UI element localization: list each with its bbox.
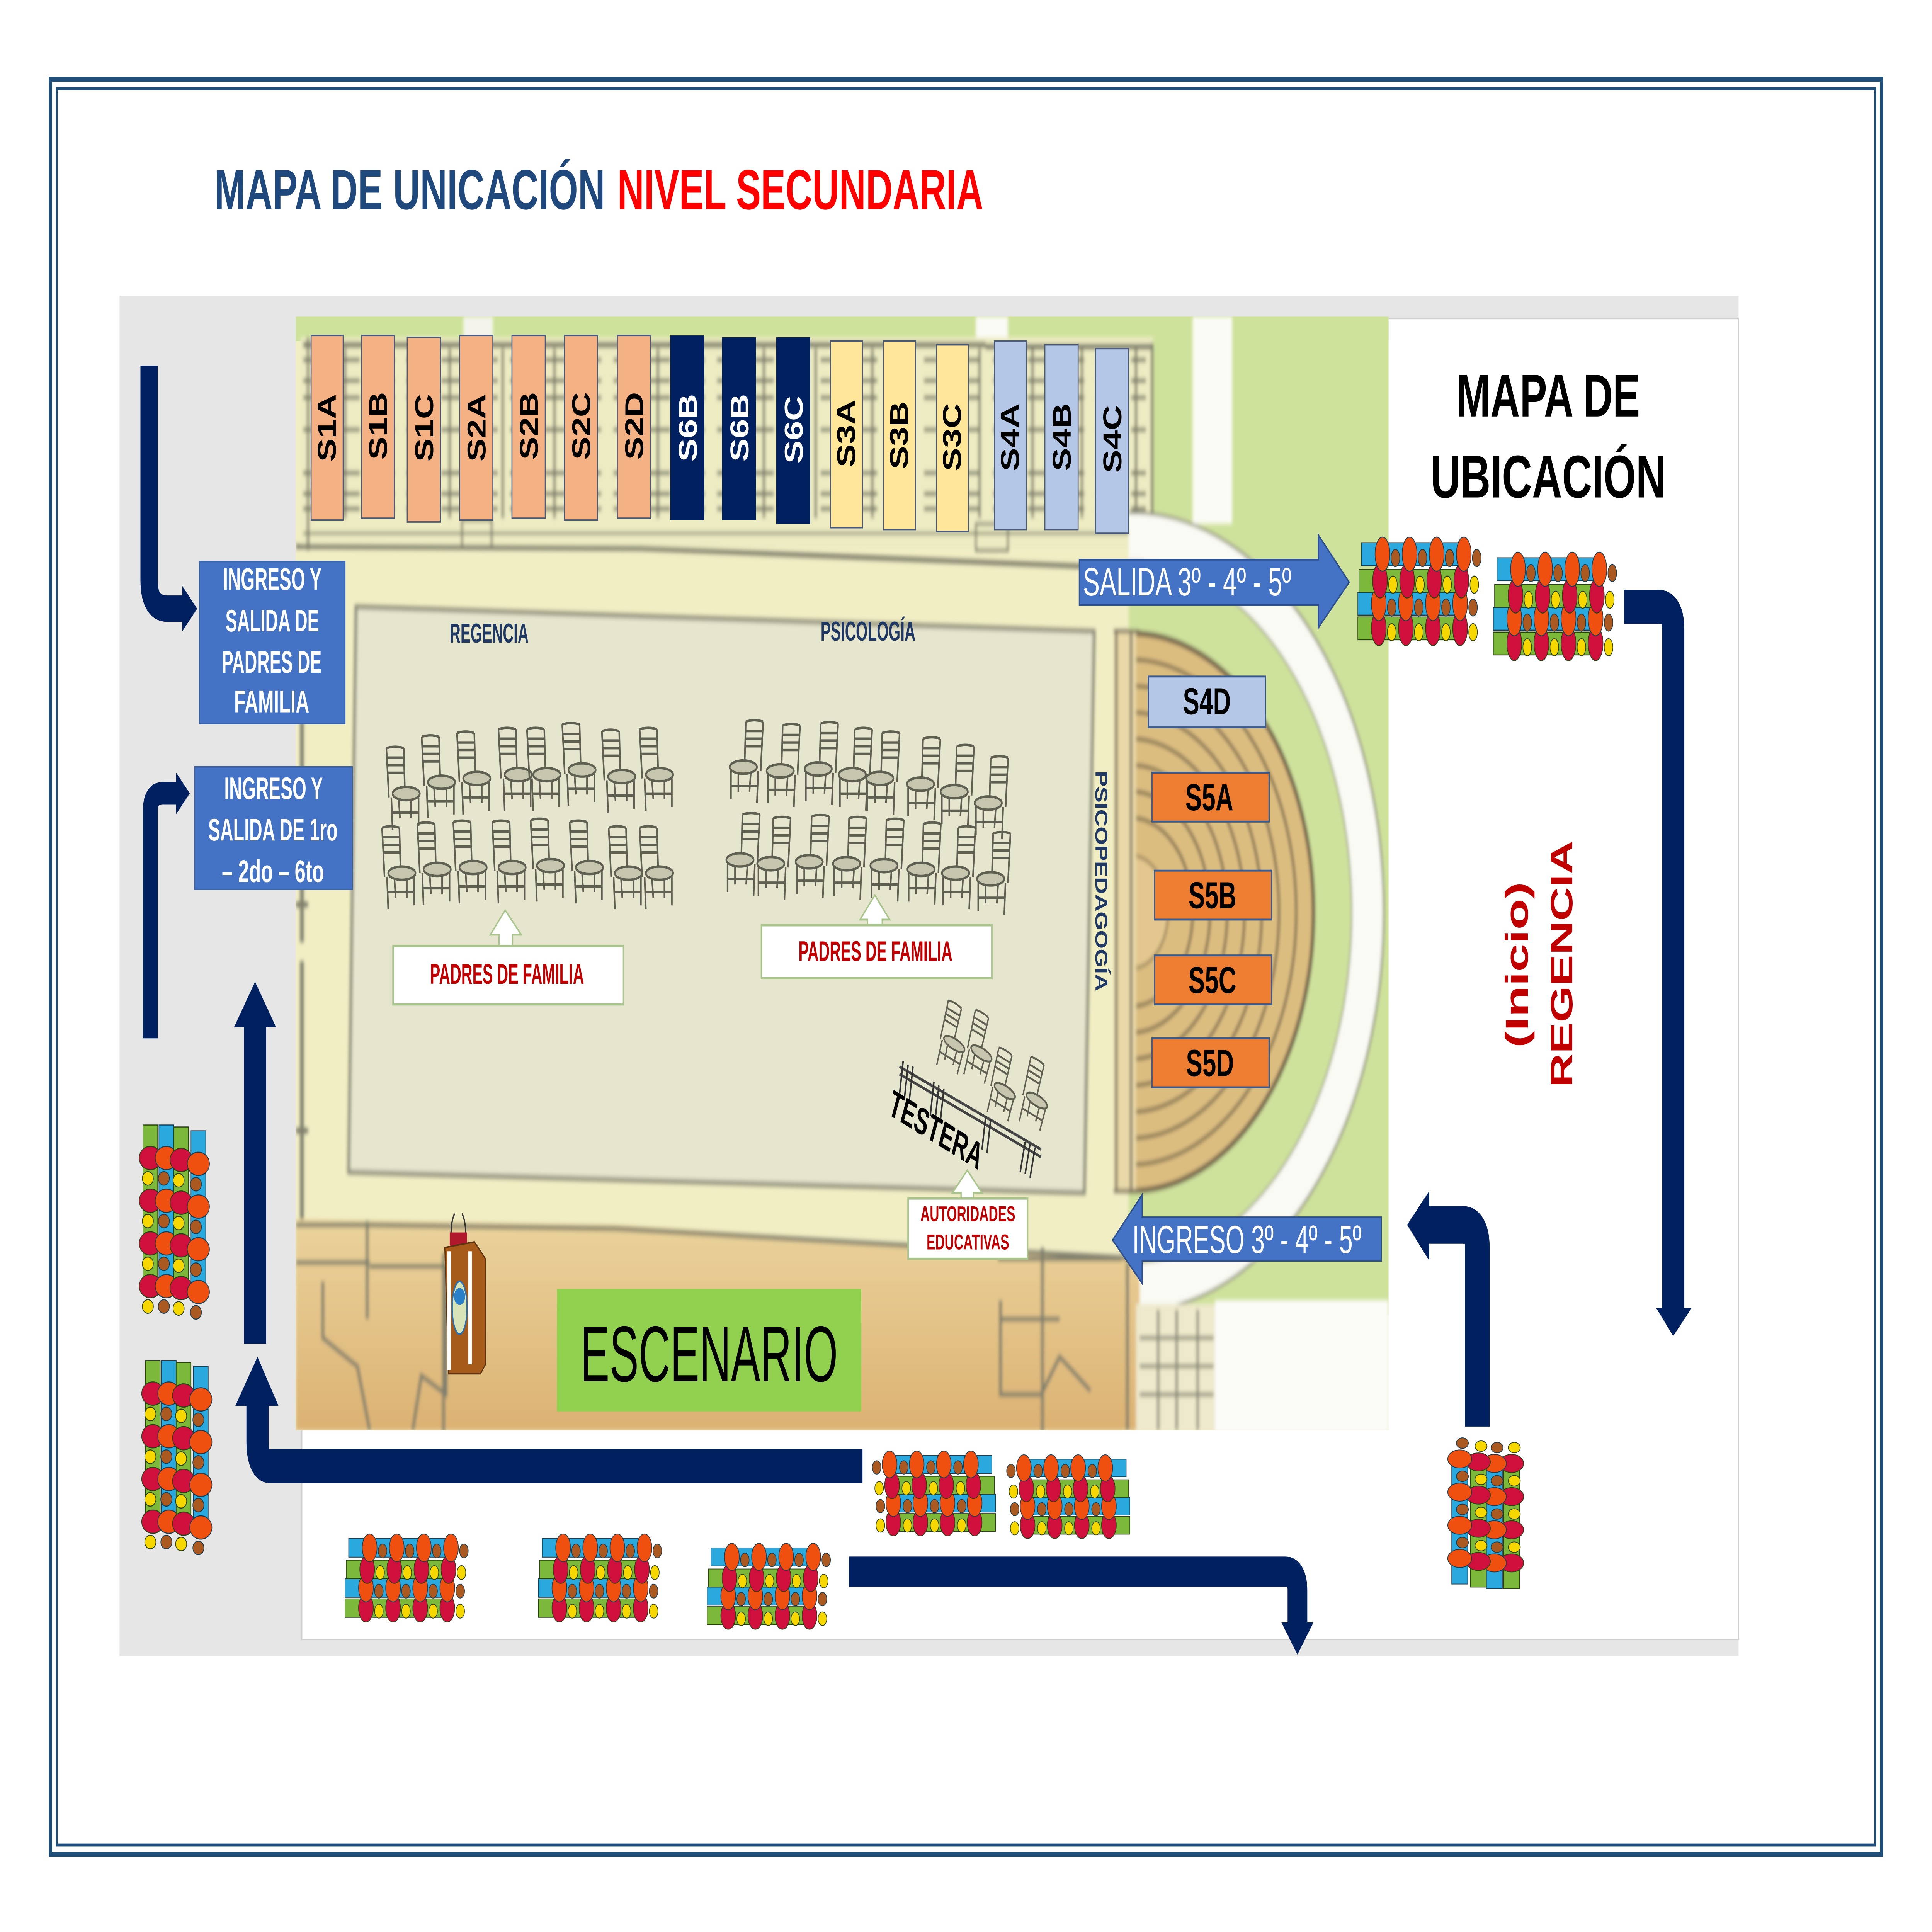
label: regencia: REGENCIA [450, 618, 529, 648]
room S6C [776, 337, 810, 524]
crowd: students left column lower [142, 1361, 212, 1554]
room S6B second: S6B [726, 394, 754, 462]
box: ingreso 1ro 2do 6to: – 2do – 6to [222, 854, 324, 889]
room S3B [883, 341, 915, 529]
box: ingreso padres de familia: PADRES DE [222, 645, 321, 680]
box: ingreso 1ro 2do 6to: INGRESO Y [224, 771, 323, 806]
room S6B first: S6B [674, 394, 702, 462]
label: regencia red: REGENCIA [1544, 840, 1579, 1087]
heading: mapa de ubicacion: UBICACIÓN [1430, 443, 1666, 510]
callout: autoridades educativas: AUTORIDADES [920, 1202, 1015, 1226]
heading: mapa de ubicacion [1430, 362, 1666, 510]
crowd: students bottom centre two [1007, 1455, 1130, 1539]
crowd: students bottom left two [538, 1534, 662, 1622]
chairs: left group [382, 723, 673, 909]
room S1B: S1B [364, 392, 393, 460]
room S4D: S4D [1183, 680, 1231, 723]
room S4C [1095, 349, 1129, 533]
room S5B [1155, 871, 1272, 920]
label: inicio: (Inicio) [1499, 882, 1535, 1048]
room S3A [830, 341, 862, 528]
arrow: salida 3 4 5 [1079, 535, 1349, 628]
arrow: bottom right to down [849, 1571, 1313, 1655]
crowd: students right column [1448, 1438, 1524, 1588]
room S1C [407, 337, 440, 522]
arrow: big up [234, 982, 276, 1344]
callout: padres de familia left [393, 910, 624, 1004]
room S5D [1152, 1038, 1269, 1087]
arrow: left up to students box [150, 773, 190, 1038]
room S5A: S5A [1185, 777, 1233, 818]
arrow: ingreso 3 4 5: INGRESO 3º - 4º - 5º [1132, 1218, 1362, 1262]
callout: padres de familia left: PADRES DE FAMILIA [430, 959, 584, 990]
room S6B second [722, 337, 756, 520]
room S4A [994, 341, 1026, 529]
box: ingreso 1ro 2do 6to [195, 767, 352, 889]
box: ingreso padres de familia [200, 561, 345, 724]
room S2C [564, 335, 598, 520]
room S1C: S1C [410, 394, 439, 462]
room S4A: S4A [996, 403, 1025, 471]
crowd: students bottom left three [707, 1543, 830, 1629]
callout: padres de familia right [762, 895, 992, 978]
arrow: up then left to ingreso [1407, 1191, 1477, 1427]
testera table with chairs [900, 999, 1056, 1178]
room S2B [512, 335, 545, 518]
room S5D: S5D [1186, 1042, 1234, 1084]
callout: padres de familia right: PADRES DE FAMILIA [798, 936, 952, 968]
room S2D [617, 335, 651, 518]
crowd: students bottom centre one [872, 1451, 996, 1536]
room S2D: S2D [620, 392, 649, 460]
label: psicologia: PSICOLOGÍA [821, 616, 915, 647]
room S4B: S4B [1048, 403, 1077, 471]
room S4D [1148, 677, 1265, 728]
label: escenario [557, 1289, 861, 1412]
box: ingreso padres de familia: INGRESO Y [223, 562, 321, 597]
room S6C: S6C [780, 396, 808, 464]
room S3A: S3A [832, 400, 861, 467]
room S1A [311, 335, 343, 520]
title: MAPA DE UNICACIÓN [214, 158, 605, 221]
icon: podium [445, 1214, 485, 1374]
room S5B: S5B [1189, 874, 1236, 917]
room S5C [1155, 956, 1272, 1004]
label: testera: TESTERA [885, 1082, 987, 1178]
room S1A: S1A [313, 394, 342, 462]
callout: autoridades educativas: EDUCATIVAS [927, 1230, 1009, 1254]
arrow: ingreso 3 4 5 [1112, 1195, 1381, 1283]
room S3B: S3B [885, 401, 914, 469]
arrow: salida 3 4 5: SALIDA 3º - 4º - 5º [1083, 560, 1291, 604]
label: psicopedagogia: PSICOPEDAGOGÍA [1092, 771, 1111, 991]
room S6B first [670, 335, 704, 520]
box: ingreso padres de familia: FAMILIA [234, 684, 309, 719]
room S2A [459, 335, 493, 520]
room S5A [1152, 773, 1269, 821]
label: escenario: ESCENARIO [580, 1310, 838, 1398]
heading: mapa de ubicacion: MAPA DE [1456, 362, 1640, 429]
room S2B: S2B [515, 392, 544, 460]
arrow: top left down to padres [149, 366, 197, 631]
panel: gray surround [119, 296, 1738, 1656]
room S3C [936, 345, 968, 531]
room S1B [362, 335, 394, 518]
box: ingreso padres de familia: SALIDA DE [226, 604, 319, 638]
arrow: right side down [1624, 607, 1692, 1336]
panel: white inner area [302, 318, 1738, 1639]
crowd: students top right two [1493, 552, 1617, 661]
room S5C: S5C [1189, 959, 1236, 1001]
callout: autoridades educativas [908, 1170, 1027, 1259]
room S2C: S2C [567, 392, 596, 460]
crowd: students top right one [1358, 537, 1481, 646]
crowd: students left column upper [139, 1125, 209, 1319]
chairs: right group [726, 720, 1010, 915]
title red part: NIVEL SECUNDARIA [617, 158, 983, 221]
room S2A: S2A [463, 394, 491, 462]
panel: school plan map [296, 316, 1389, 1432]
room S4C: S4C [1098, 405, 1127, 473]
room S3C: S3C [938, 403, 967, 471]
box: ingreso 1ro 2do 6to: SALIDA DE 1ro [208, 813, 338, 847]
arrow: bottom left to up [235, 1357, 862, 1466]
room S4B [1045, 345, 1078, 529]
crowd: students bottom left one [345, 1534, 468, 1622]
